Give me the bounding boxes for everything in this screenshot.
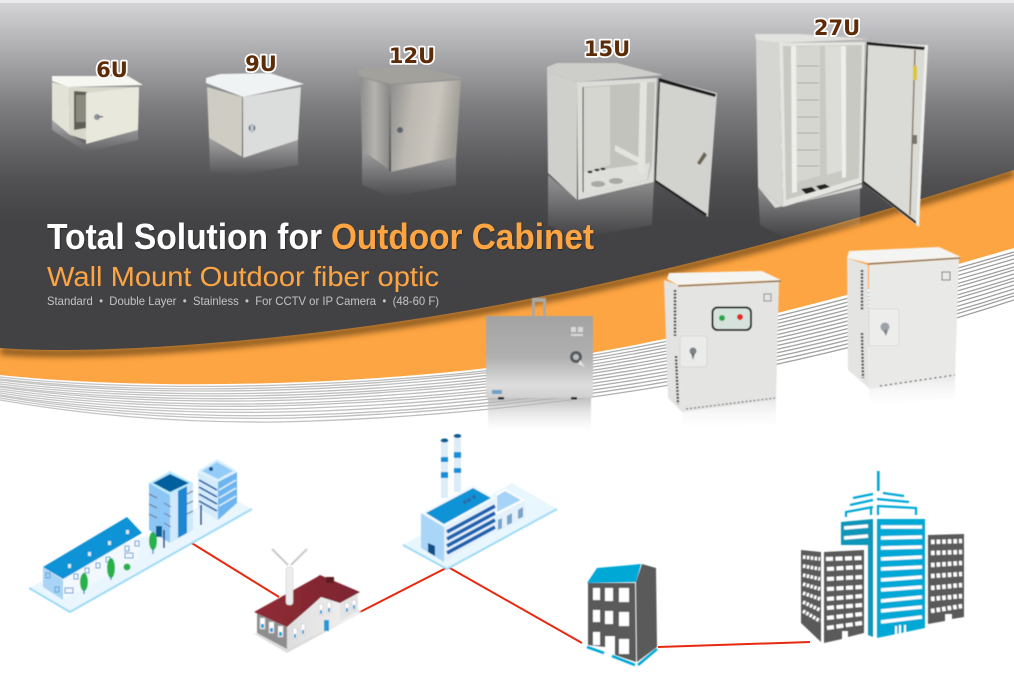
icon: office towers [801,471,964,643]
icon: apartment building [587,564,657,665]
label: 6U: 6U [96,58,128,82]
cabinet: 15U [547,63,717,238]
cabinet: 9U [206,73,304,175]
subtitle: Wall Mount Outdoor fiber optic [47,261,439,292]
cabinet: 27U [755,34,928,238]
title: Total Solution for [47,216,322,257]
banner: grey stripes [0,252,1014,422]
cabinet: key-lock box [847,247,961,410]
title [47,216,594,257]
icon: residential block [29,459,252,612]
cabinet: control box with indicator lights [664,271,781,432]
label: 12U: 12U [389,44,435,68]
banner: dark gradient panel [0,3,1014,350]
banner: swoosh shadow [0,173,1014,353]
label: 9U: 9U [245,52,277,76]
icon: factory [403,434,557,569]
top edge strip [0,0,1014,3]
cabinet: 12U [358,67,464,197]
connection lines [190,542,810,647]
label: 15U: 15U [584,37,630,61]
product list: Standard • Double Layer • Stainless • For CCTV or IP Camera • (48-60 F) [47,294,439,308]
banner: orange swoosh [0,150,1014,384]
label: 27U: 27U [814,16,860,40]
icon: house with antenna [253,549,362,653]
title: Outdoor Cabinet [331,216,594,257]
cabinet: stainless wall box [486,298,593,432]
cabinet: 6U [52,76,143,152]
